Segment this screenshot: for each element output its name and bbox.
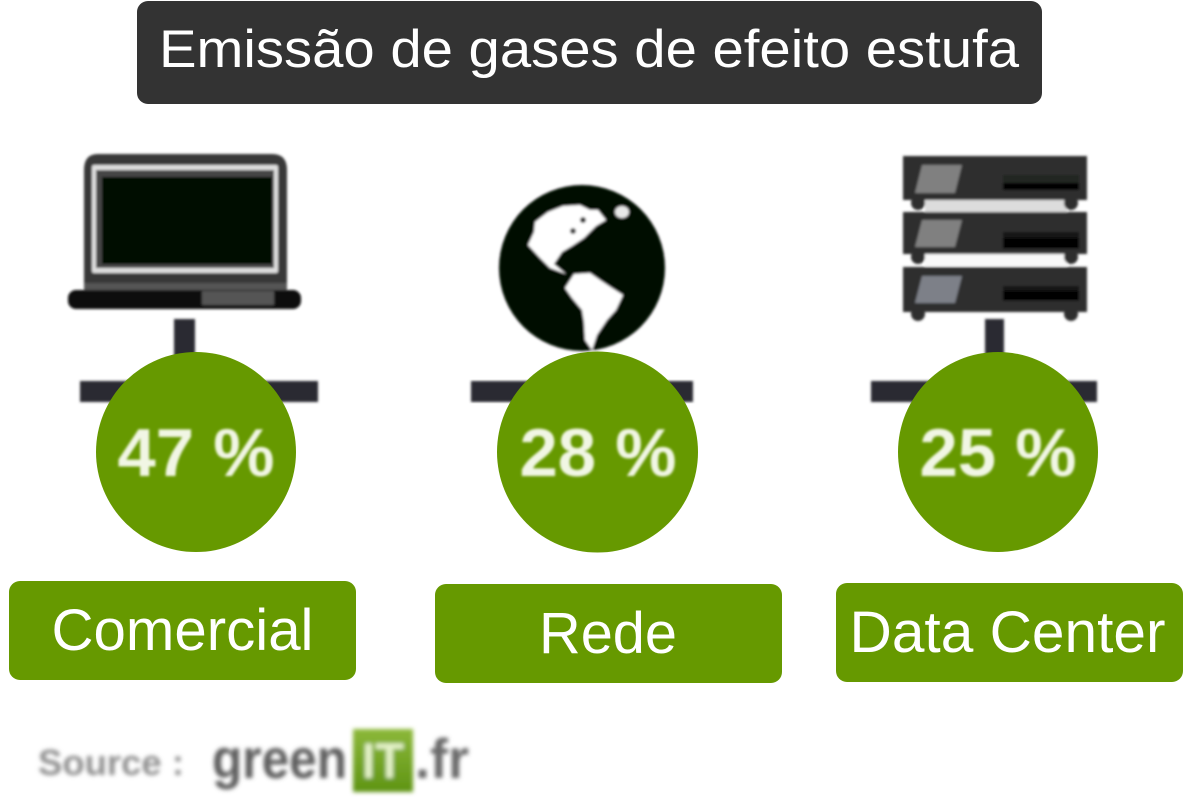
- connector lines: [871, 319, 1097, 402]
- logo: greenIT.fr: .fr: [415, 727, 469, 790]
- source credit: [38, 727, 469, 792]
- logo: greenIT.fr: IT: [362, 733, 404, 789]
- connector lines: [80, 319, 318, 402]
- source label: Source :: [38, 742, 184, 783]
- panel: data center: [836, 156, 1183, 682]
- panel: rede: [435, 185, 782, 683]
- connector line: [471, 381, 693, 402]
- icon: server stack: [903, 156, 1087, 321]
- percentage circle: [96, 352, 296, 552]
- percentage circle: 47 %: [118, 415, 274, 491]
- percentage circle: 25 %: [920, 415, 1076, 491]
- panel: comercial: [9, 154, 356, 680]
- label: Data Center: [850, 600, 1166, 665]
- label: [9, 581, 356, 680]
- label: Comercial: [52, 598, 314, 663]
- percentage circle: [898, 352, 1098, 552]
- logo: greenIT.fr: [212, 727, 469, 792]
- icon: laptop: [68, 154, 301, 309]
- title: [137, 1, 1042, 104]
- label: [836, 583, 1183, 682]
- label: [435, 584, 782, 683]
- label: Rede: [539, 601, 677, 666]
- percentage circle: [497, 352, 698, 552]
- percentage circle: 28 %: [520, 415, 676, 491]
- title: Emissão de gases de efeito estufa: [159, 20, 1020, 79]
- icon: globe: [499, 185, 665, 351]
- logo: greenIT.fr: green: [212, 727, 347, 790]
